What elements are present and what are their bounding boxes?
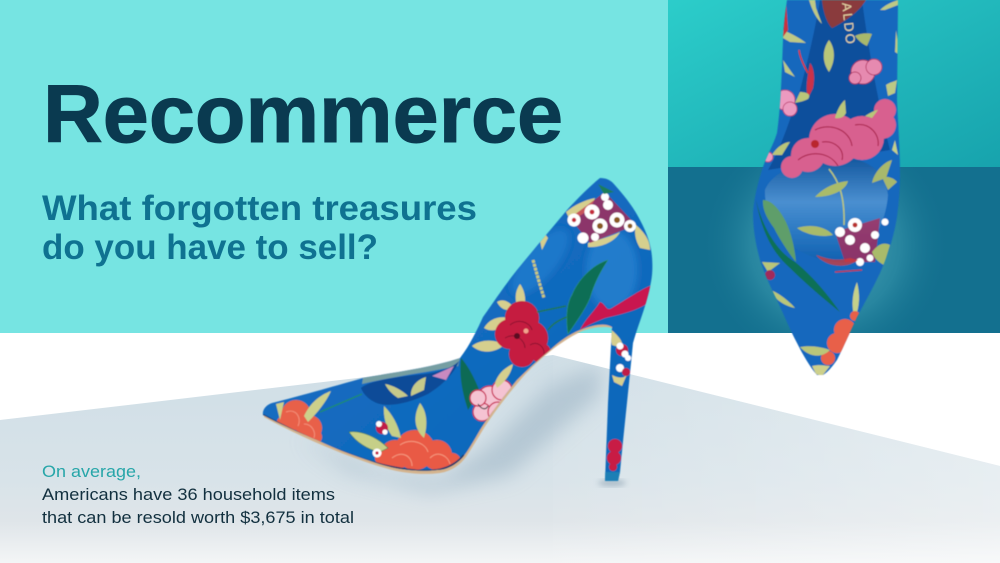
subtitle: do you have to sell? bbox=[42, 228, 378, 267]
subtitle bbox=[42, 189, 477, 267]
small pink flowers bbox=[849, 59, 882, 84]
standing floral high heel shoe bbox=[255, 170, 660, 490]
toe orange flower bbox=[821, 311, 860, 365]
long green leaf bbox=[763, 200, 796, 262]
sole underside highlight bbox=[263, 415, 464, 471]
leaves top bbox=[809, 0, 822, 24]
stem and leaves on insole bbox=[829, 169, 844, 225]
red strands bbox=[783, 2, 788, 37]
dark green leaf bbox=[460, 358, 480, 410]
lower leaves bbox=[762, 262, 780, 272]
panel: pale floor bbox=[0, 355, 1000, 563]
text block: household items statistic: On average, bbox=[42, 463, 141, 481]
pink flower bbox=[470, 380, 512, 422]
vamp leaves bbox=[349, 432, 388, 452]
big pink flower bbox=[781, 99, 896, 178]
heel tip bbox=[604, 472, 621, 482]
text block: household items statistic: Americans have 36 household items bbox=[42, 486, 335, 504]
glow behind hanging shoe bbox=[668, 167, 1000, 333]
yellow leaf strip bbox=[540, 230, 548, 250]
panel: lower right dark teal block bbox=[668, 167, 1000, 333]
inner opening bbox=[361, 361, 459, 405]
heel red flower bbox=[607, 439, 622, 471]
panel: light teal title block bbox=[0, 0, 668, 333]
heel blossoms bbox=[609, 328, 631, 386]
back rim bbox=[362, 358, 460, 384]
large orange flower bbox=[375, 430, 461, 471]
satin sheen bbox=[586, 230, 638, 310]
wheat sprig bbox=[533, 260, 544, 298]
upper green tip bbox=[598, 184, 614, 194]
ALDO logo: ALDO bbox=[839, 2, 858, 46]
red flower bbox=[495, 301, 551, 367]
magenta strip bbox=[580, 285, 652, 330]
text block: household items statistic bbox=[42, 463, 354, 527]
toe orange flower bbox=[276, 400, 322, 444]
panel: upper right teal block bbox=[668, 0, 1000, 167]
green stems bbox=[536, 304, 568, 331]
toe leaves bbox=[304, 391, 331, 422]
leaves mid bbox=[835, 100, 846, 118]
small blossoms bbox=[372, 421, 388, 458]
hanging floral high heel shoe bbox=[753, 0, 900, 376]
title: Recommerce bbox=[43, 69, 563, 160]
shadow under standing shoe bbox=[300, 365, 626, 492]
shoe body bbox=[255, 170, 660, 490]
upper blossoms cluster bbox=[568, 192, 636, 244]
insole bbox=[765, 158, 888, 262]
text block: household items statistic: that can be resold worth $3,675 in total bbox=[42, 509, 354, 527]
yellow leaves bbox=[495, 364, 513, 388]
collar brown flower bbox=[822, 0, 866, 28]
sole edge bbox=[264, 322, 612, 474]
large green leaf bbox=[567, 260, 608, 334]
subtitle: What forgotten treasures bbox=[42, 189, 477, 228]
blossoms bbox=[835, 218, 888, 266]
inner shaft shadow bbox=[768, 0, 890, 170]
